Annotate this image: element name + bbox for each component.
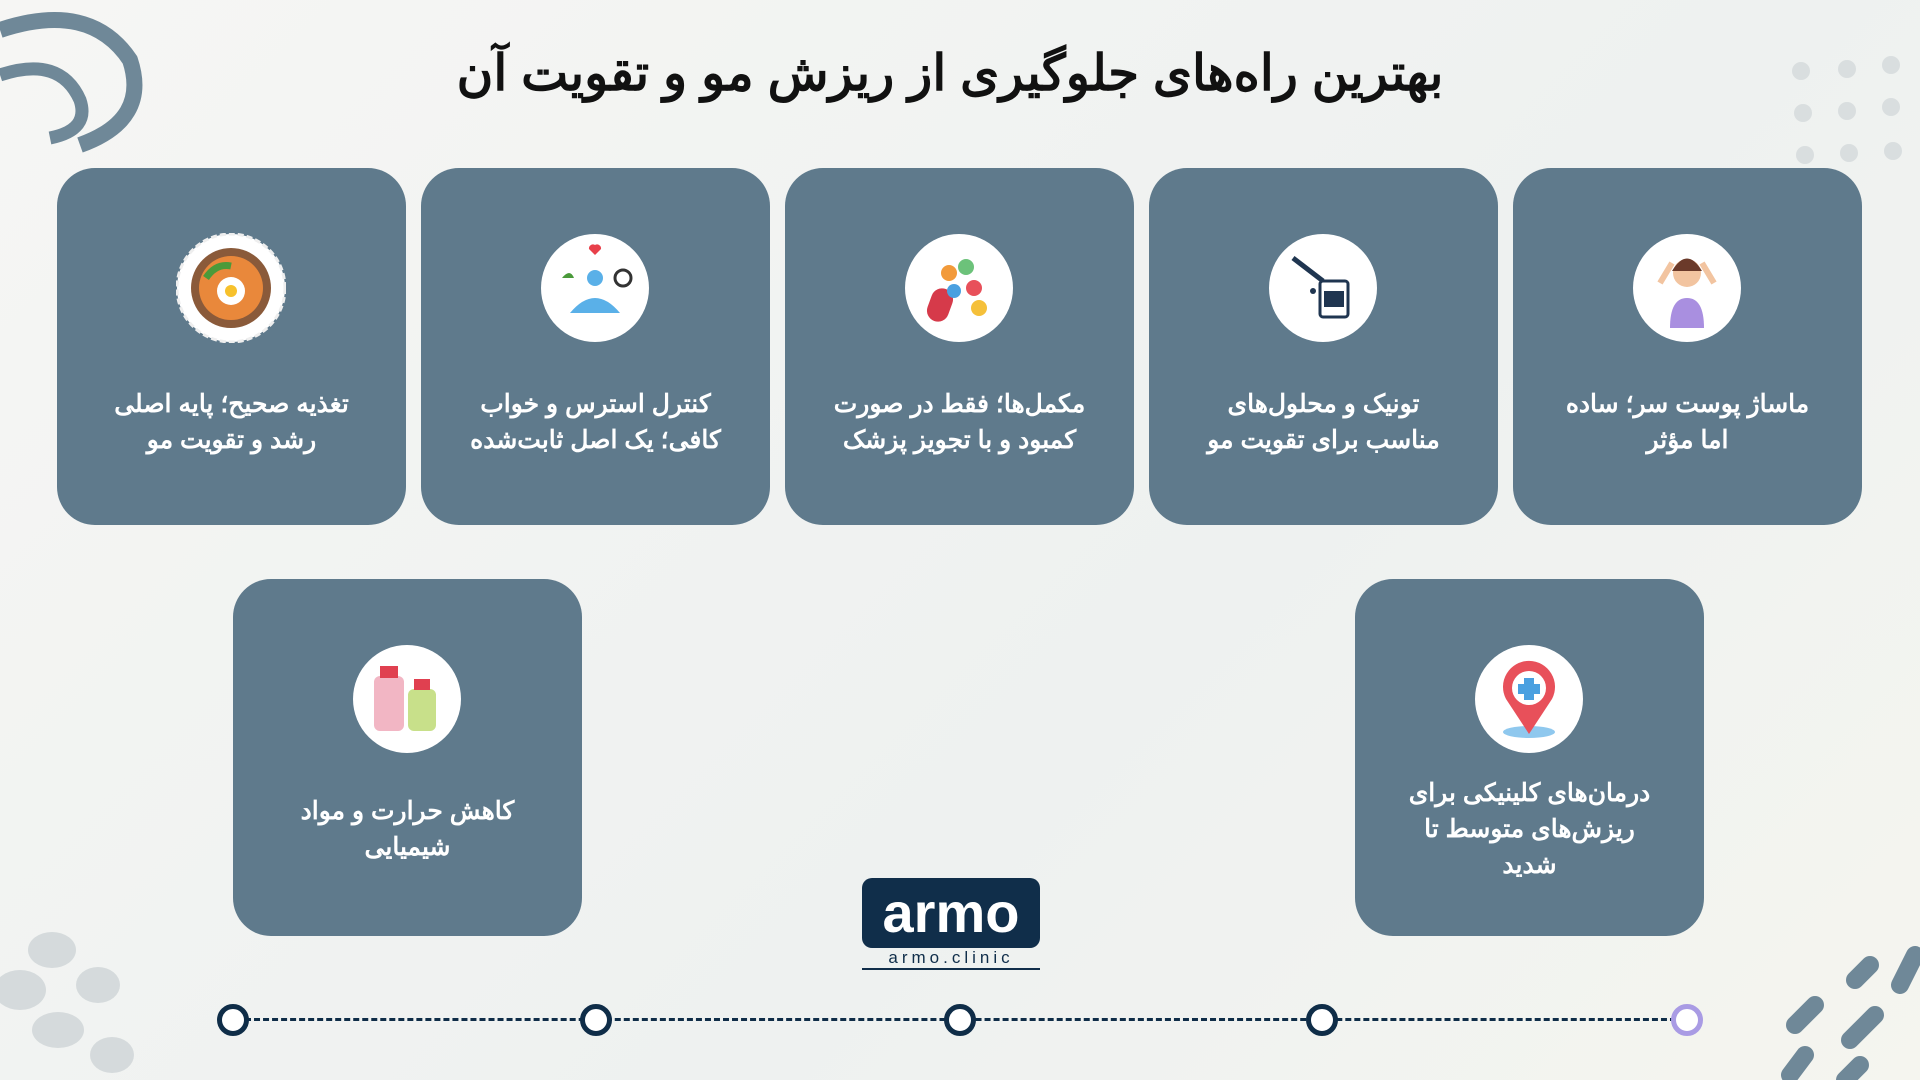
card: nutrition [57,168,406,525]
logo [862,878,1040,970]
text: مکمل‌ها؛ فقط در صورت کمبود و با تجویز پزشک [834,390,1085,454]
icon: bottles [353,645,461,753]
decoration: bottom-left blobs [0,932,134,1073]
text: کاهش حرارت و مواد شیمیایی [301,797,514,861]
text: ماساژ پوست سر؛ ساده اما مؤثر [1566,390,1809,454]
text: تونیک و محلول‌های مناسب برای تقویت مو [1207,390,1440,454]
text: تغذیه صحیح؛ پایه اصلی رشد و تقویت مو [114,390,349,454]
decoration: top-left swirl [0,12,142,152]
text: کنترل استرس و خواب کافی؛ یک اصل ثابت‌شده [470,390,721,454]
icon: dropper bottle [1269,234,1377,342]
card: scalp massage [1513,168,1862,525]
card: clinical treatments [1355,579,1704,936]
logo: armo.clinic [888,948,1014,967]
card: stress [421,168,770,525]
card: heat and chemicals [233,579,582,936]
icon: woman massaging [1633,234,1741,342]
icon: vitamins [905,234,1013,342]
card: supplements [785,168,1134,525]
text: درمان‌های کلینیکی برای ریزش‌های متوسط تا شدید [1409,779,1650,879]
icon: medical pin [1475,645,1583,753]
decoration: bottom-right strokes [1781,946,1920,1080]
icon: meditation [541,234,649,342]
logo: armo [883,881,1019,944]
icon: food bowl [176,233,286,343]
title: بهترین راه‌های جلوگیری از ریزش مو و تقویت آن [457,45,1443,101]
decoration: top-right dots [1792,56,1902,164]
card: tonic [1149,168,1498,525]
